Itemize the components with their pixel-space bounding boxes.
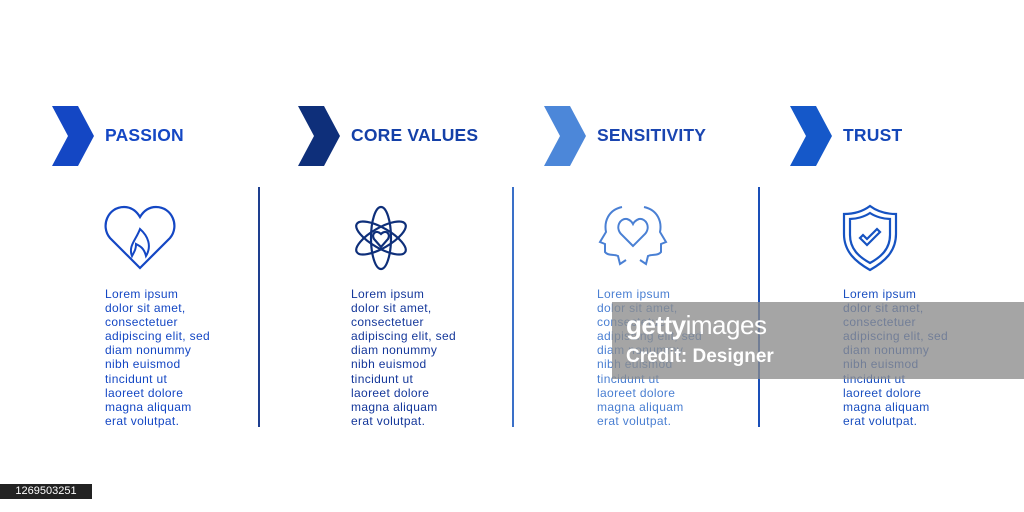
text block bbox=[597, 287, 702, 428]
watermark band bbox=[612, 302, 1024, 379]
text block: magna aliquam bbox=[597, 400, 684, 414]
icon: heart flame bbox=[104, 206, 176, 270]
text block: adipiscing elit, sed bbox=[105, 329, 210, 343]
text block: laoreet dolore bbox=[105, 386, 183, 400]
text block: diam nonummy bbox=[351, 343, 437, 357]
id label bbox=[0, 484, 92, 499]
text block: erat volutpat. bbox=[597, 414, 671, 428]
text block: magna aliquam bbox=[351, 400, 438, 414]
text block: nibh euismod bbox=[351, 357, 427, 371]
watermark band: Credit: Designer bbox=[626, 346, 774, 367]
text block: dolor sit amet, bbox=[351, 301, 432, 315]
id label: 1269503251 bbox=[15, 485, 77, 497]
text block: tincidunt ut bbox=[351, 372, 413, 386]
text block: laoreet dolore bbox=[351, 386, 429, 400]
text block: tincidunt ut bbox=[597, 372, 659, 386]
heading: core values: CORE VALUES bbox=[351, 125, 478, 145]
text block: laoreet dolore bbox=[597, 386, 675, 400]
text block: magna aliquam bbox=[105, 400, 192, 414]
text block: erat volutpat. bbox=[351, 414, 425, 428]
heading: sensitivity: SENSITIVITY bbox=[597, 125, 706, 145]
text block bbox=[351, 287, 456, 428]
text block: Lorem ipsum bbox=[597, 287, 670, 301]
text block: dolor sit amet, bbox=[597, 301, 678, 315]
text block: consectetuer bbox=[105, 315, 178, 329]
text block bbox=[105, 287, 210, 428]
column: trust bbox=[790, 106, 948, 428]
column: passion bbox=[52, 106, 210, 428]
heading: passion: PASSION bbox=[105, 125, 184, 145]
text block: adipiscing elit, sed bbox=[843, 329, 948, 343]
text block: dolor sit amet, bbox=[105, 301, 186, 315]
text block: nibh euismod bbox=[843, 357, 919, 371]
heading: trust: TRUST bbox=[843, 125, 902, 145]
text block: nibh euismod bbox=[597, 357, 673, 371]
text block: dolor sit amet, bbox=[843, 301, 924, 315]
text block: Lorem ipsum bbox=[351, 287, 424, 301]
text block: nibh euismod bbox=[105, 357, 181, 371]
text block: tincidunt ut bbox=[843, 372, 905, 386]
arrow: chevron bbox=[298, 106, 340, 166]
arrow: chevron bbox=[544, 106, 586, 166]
text block: magna aliquam bbox=[843, 400, 930, 414]
arrow: chevron bbox=[790, 106, 832, 166]
text block: adipiscing elit, sed bbox=[597, 329, 702, 343]
text block: adipiscing elit, sed bbox=[351, 329, 456, 343]
text block: diam nonummy bbox=[597, 343, 683, 357]
icon: atom heart bbox=[355, 206, 407, 270]
column: sensitivity bbox=[544, 106, 706, 428]
icon: shield check bbox=[842, 204, 898, 272]
text block: diam nonummy bbox=[843, 343, 929, 357]
text block: Lorem ipsum bbox=[843, 287, 916, 301]
text block: erat volutpat. bbox=[105, 414, 179, 428]
watermark band: gettyimages bbox=[626, 310, 766, 340]
text block: consectetuer bbox=[843, 315, 916, 329]
text block: consectetuer bbox=[351, 315, 424, 329]
text block: consectetuer bbox=[597, 315, 670, 329]
text block: tincidunt ut bbox=[105, 372, 167, 386]
text block bbox=[843, 287, 948, 428]
text block: erat volutpat. bbox=[843, 414, 917, 428]
text block: Lorem ipsum bbox=[105, 287, 178, 301]
text block: diam nonummy bbox=[105, 343, 191, 357]
icon: heads heart bbox=[598, 206, 668, 266]
text block: laoreet dolore bbox=[843, 386, 921, 400]
arrow: chevron bbox=[52, 106, 94, 166]
column: core values bbox=[298, 106, 478, 428]
